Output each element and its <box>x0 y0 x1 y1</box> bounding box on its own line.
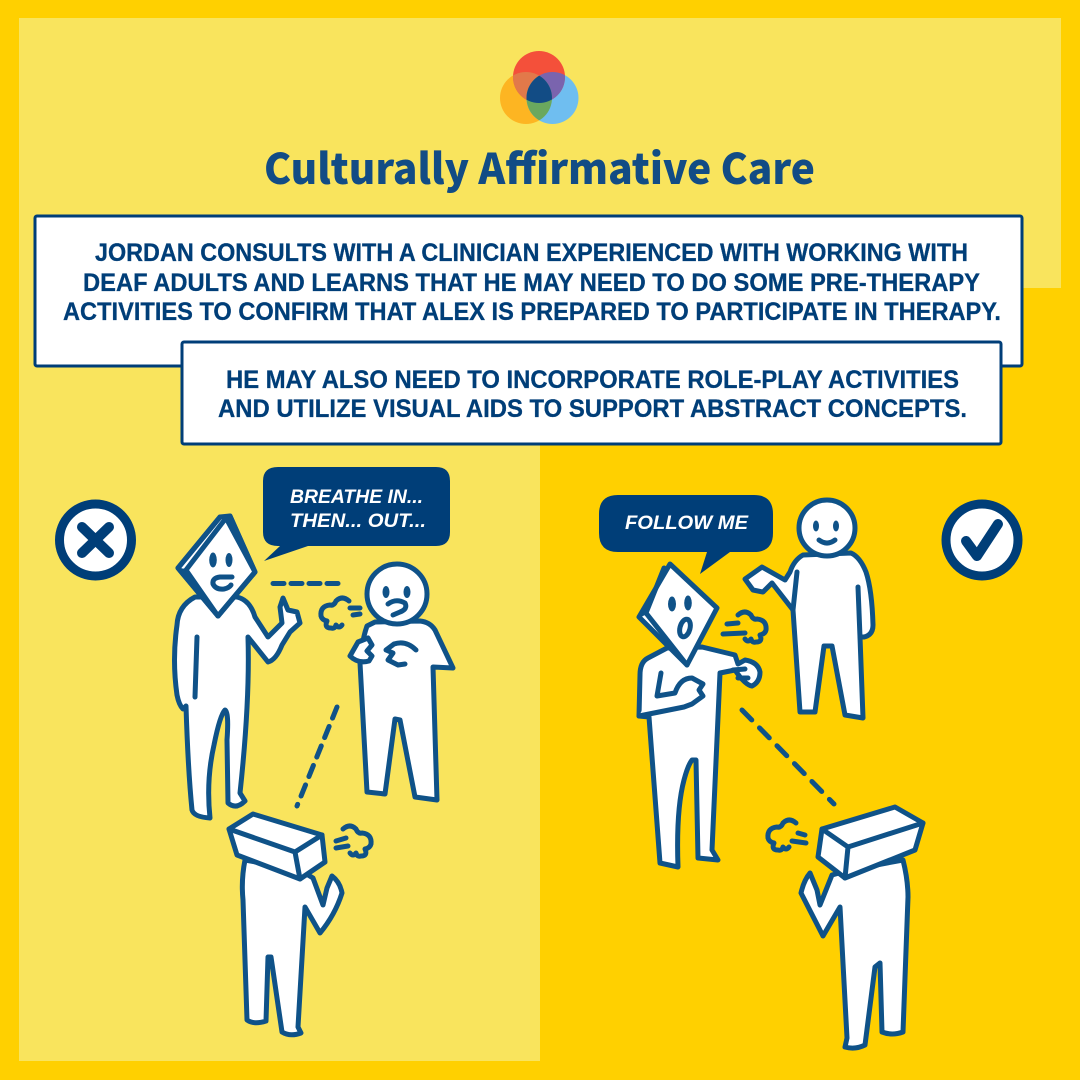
figure: box head person, left <box>229 814 371 1035</box>
figure: diamond head instructor <box>174 516 300 818</box>
dashed gaze line: left horizontal <box>273 581 341 586</box>
text box: consultation <box>35 216 1022 366</box>
speech bubble: breathe <box>263 467 450 561</box>
icon: overlapping circles logo <box>500 51 578 124</box>
icon: X mark <box>60 504 132 576</box>
figure: diamond head guide <box>639 564 766 867</box>
text box: role-play <box>182 342 1001 444</box>
figure: box head person, right <box>768 807 923 1048</box>
figure: round head person, right <box>745 500 873 718</box>
icon: check mark <box>946 504 1018 576</box>
panel: top light band <box>19 18 1061 288</box>
figure: round head person, left <box>350 564 453 800</box>
text box: consultation: DEAF ADULTS AND LEARNS THAT HE MAY NEED TO DO SOME PRE-THERAPY <box>83 269 980 297</box>
title: Culturally Affirmative Care <box>264 136 815 197</box>
text box: consultation: JORDAN CONSULTS WITH A CLINICIAN EXPERIENCED WITH WORKING WITH <box>95 239 968 267</box>
speech bubble: breathe: THEN... OUT... <box>290 511 426 532</box>
breath puff: round head person, left <box>321 598 360 628</box>
speech bubble: breathe: BREATHE IN... <box>290 487 423 508</box>
text box: role-play: HE MAY ALSO NEED TO INCORPORATE ROLE-PLAY ACTIVITIES <box>226 366 959 394</box>
speech bubble: follow me <box>599 495 773 574</box>
panel: left light column <box>19 18 540 1061</box>
text box: role-play: AND UTILIZE VISUAL AIDS TO SUPPORT ABSTRACT CONCEPTS. <box>218 395 967 423</box>
text box: consultation: ACTIVITIES TO CONFIRM THAT ALEX IS PREPARED TO PARTICIPATE IN THERAPY. <box>63 298 1001 326</box>
dashed gaze line: left diagonal <box>297 707 337 806</box>
speech bubble: follow me: FOLLOW ME <box>625 513 749 534</box>
dashed gaze line: right diagonal <box>742 710 834 804</box>
